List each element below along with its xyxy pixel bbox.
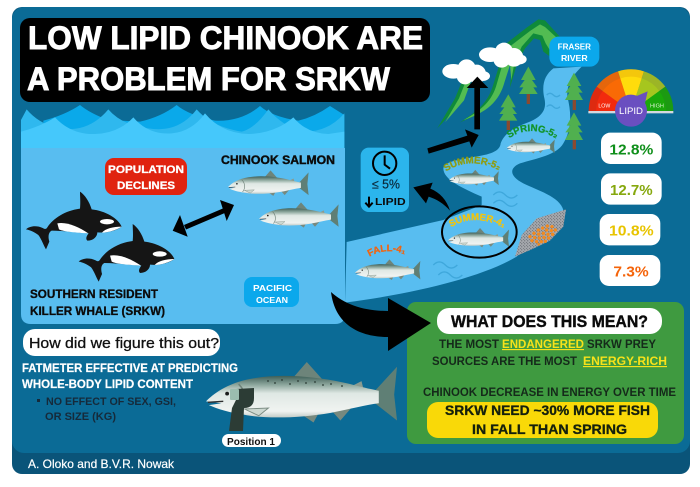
icon: tree 3 [565,73,583,110]
how did we figure this out heading [23,329,220,356]
icon: gravel bed with eggs [515,209,566,257]
position 1 label: Position 1 [227,436,275,448]
panel: what does this mean: CHINOOK DECREASE IN ENERGY OVER TIME [423,387,676,399]
icon: clock [373,152,396,175]
river stock: summer-5: SUMMER-5₂ [444,156,500,171]
panel: Pacific Ocean water with waves [21,105,345,324]
icon: tree 1 [519,67,538,104]
fatmeter text block: FATMETER EFFECTIVE AT PREDICTING [22,363,238,375]
population declines label: DECLINES [117,180,175,192]
icon: chinook salmon 2 [259,202,339,228]
icon: fatmeter device [229,388,254,431]
arrow: upstream migration [427,129,479,154]
river stock: summer-5 [444,156,500,186]
pacific ocean label [244,277,299,307]
fraser river label: FRASER [558,42,591,51]
arrow: curved to time box [413,183,450,211]
southern resident killer whale label [30,289,165,318]
time and lipid decline box: ≤ 5% [372,178,400,192]
arrow: up to the headwaters [467,77,488,129]
river stock: summer-4 circled [441,205,518,259]
panel: what does this mean: IN FALL THAN SPRING [472,422,627,437]
title: A PROBLEM FOR SRKW [27,61,390,97]
lipid value: summer-4: 10.8% [609,223,654,240]
lipid value: spring: 12.8% [609,141,653,158]
river stock: spring-5 [506,124,558,154]
population declines label [105,158,187,195]
title: LOW LIPID CHINOOK ARE [28,20,423,56]
panel: what does this mean [407,302,684,444]
panel: what does this mean: SOURCES ARE THE MOST [432,356,577,368]
icon: chinook salmon 1 [228,170,309,196]
icon: tree 4 [565,112,583,149]
fatmeter text block: OR SIZE (KG) [45,411,116,423]
icon: large salmon with fatmeter [206,362,397,431]
river stock: fall-4: FALL-4₁ [366,244,405,256]
southern resident killer whale label: SOUTHERN RESIDENT [30,289,158,301]
pacific ocean label: PACIFIC [253,283,292,293]
pacific ocean label: OCEAN [256,295,288,305]
population declines label: POPULATION [108,164,184,176]
river [345,67,582,303]
fatmeter text block: WHOLE-BODY LIPID CONTENT [22,379,193,391]
lipid value: summer-5: 12.7% [610,182,653,199]
lipid gauge: HIGH [650,104,664,110]
fatmeter text block [22,363,238,423]
title [20,18,430,102]
icon: killer whale 1 [26,192,122,249]
river stock: summer-4 circled: SUMMER-4₁ [448,213,504,228]
icon: tree 2 [499,94,517,130]
lipid gauge: LOW [598,104,611,110]
mountain [437,19,561,128]
southern resident killer whale label: KILLER WHALE (SRKW) [30,306,165,318]
river stock: spring-5: SPRING-5₂ [506,124,558,138]
panel: what does this mean: SRKW PREY [587,339,656,351]
lipid value: summer-5 [601,173,662,205]
panel: what does this mean: THE MOST [439,339,499,351]
lipid gauge [588,69,673,127]
lipid value: summer-4 [600,214,660,245]
arrow: large curved arrow to conclusions [331,292,431,351]
river ripples [433,93,560,278]
icon: cloud 2 [479,43,527,68]
chinook salmon heading: CHINOOK SALMON [221,153,335,167]
time and lipid decline box [361,148,409,212]
time and lipid decline box: LIPID [375,197,406,208]
icon: cloud 1 [442,59,490,84]
panel: what does this mean: WHAT DOES THIS MEAN? [451,313,648,331]
fatmeter text block: NO EFFECT OF SEX, GSI, [46,396,176,408]
arrow: whale and salmon interaction [173,200,234,237]
lipid value: fall: 7.3% [613,263,649,280]
lipid value: spring [601,133,662,164]
panel: what does this mean: ENERGY-RICH [583,356,667,368]
fraser river label: RIVER [561,54,588,63]
fraser river label [549,37,599,67]
lipid value: fall [600,255,660,286]
panel: what does this mean: ENDANGERED [502,339,584,351]
author credit footer: A. Oloko and B.V.R. Nowak [28,457,175,471]
panel: what does this mean: SRKW NEED ~30% MORE FISH [445,403,650,418]
lipid gauge: LIPID [619,106,643,116]
river stock: fall-4 [355,244,420,280]
how did we figure this out heading: How did we figure this out? [29,336,219,352]
icon: killer whale 2 [79,224,174,282]
